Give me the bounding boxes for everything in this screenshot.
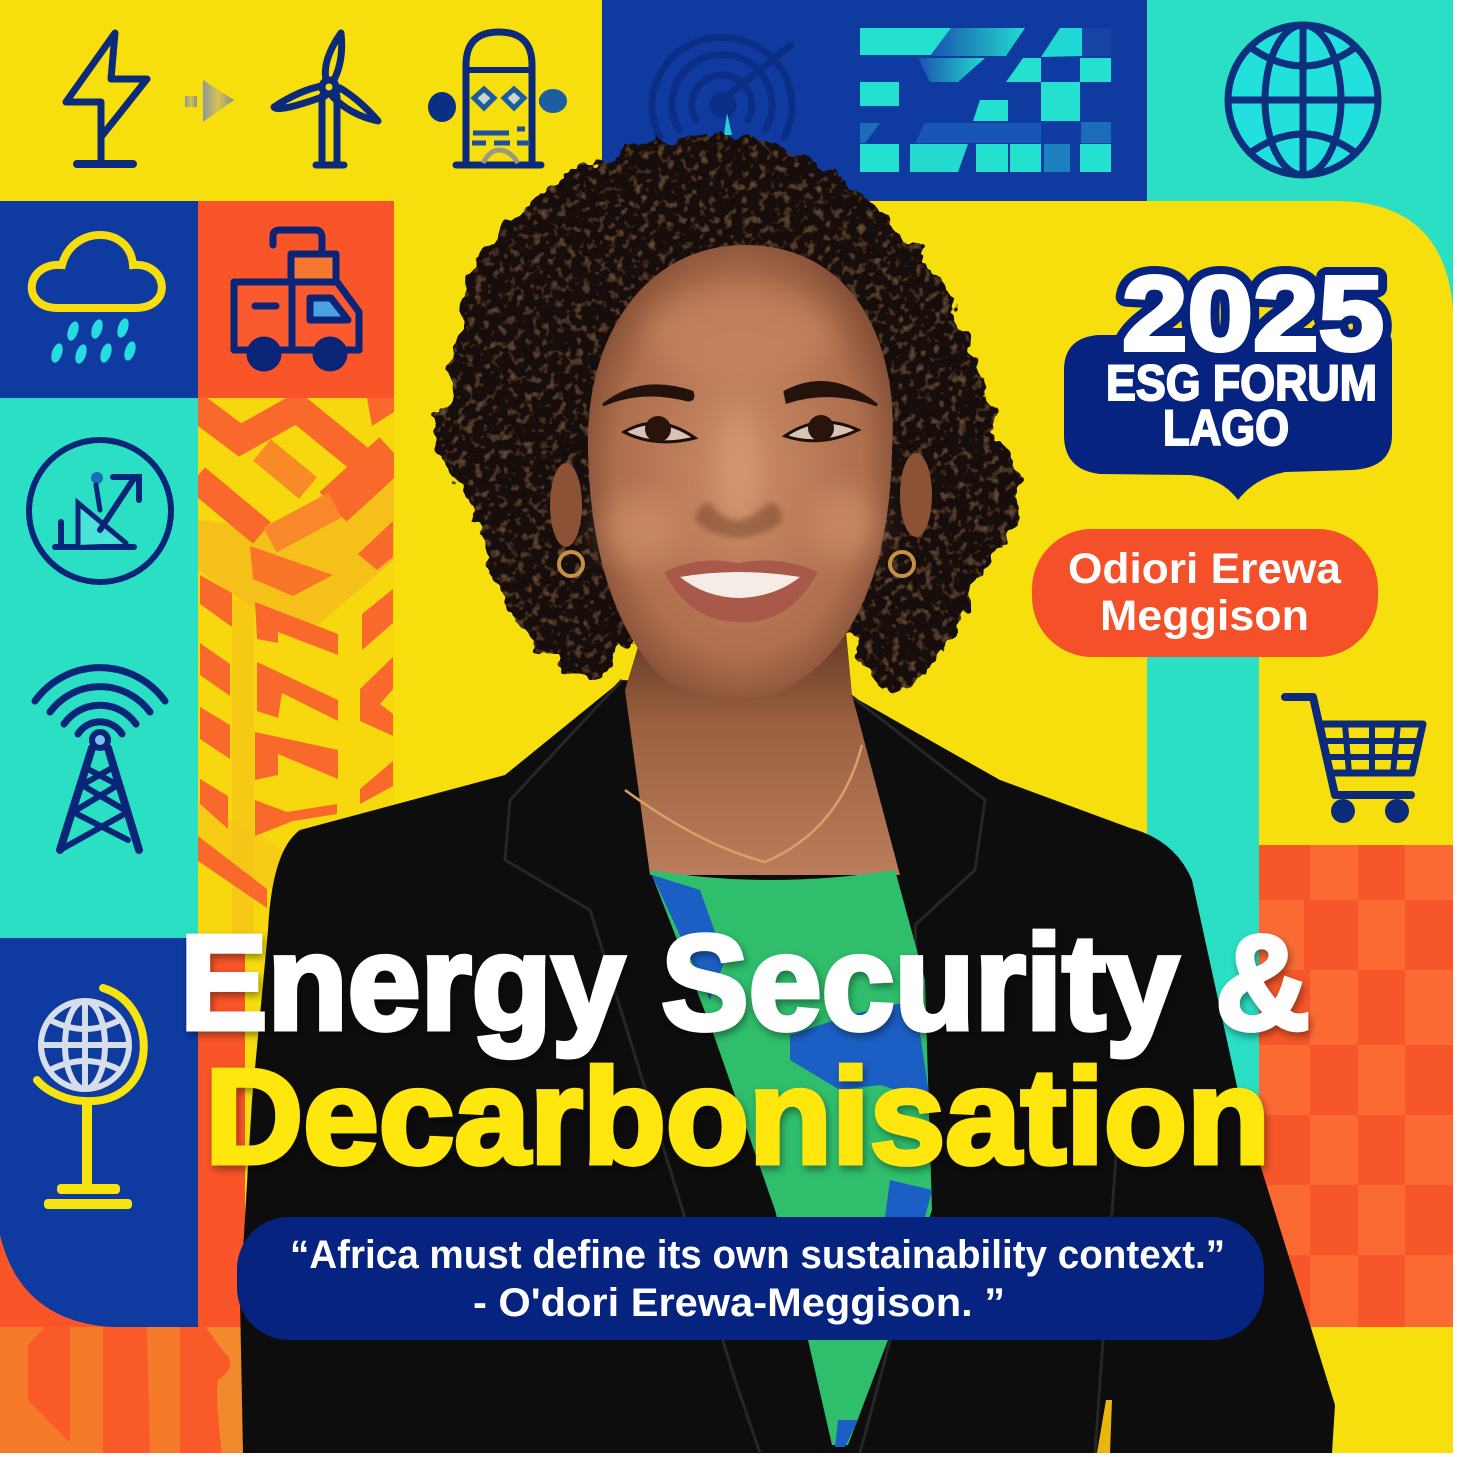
face [588, 245, 893, 699]
last name line: Meggison [1100, 592, 1309, 640]
forum name: ESG FORUM [1106, 355, 1377, 411]
icon: shopping cart [1285, 697, 1423, 823]
icon: teal mosaic blocks [860, 28, 1111, 172]
title: Energy Security &: Energy Security & [180, 907, 1310, 1058]
left eyebrow [603, 386, 693, 405]
quote line one: “Africa must define its own sustainability context.” [290, 1233, 1225, 1277]
panel: teal vertical strip [1147, 650, 1259, 1100]
right eyebrow [785, 383, 877, 405]
panel: top navy block [602, 0, 1147, 201]
neck and chest [625, 620, 900, 875]
year outline: 2025 [1122, 255, 1384, 373]
earrings [559, 552, 914, 576]
left eye [624, 416, 695, 442]
panel: teal left column [0, 398, 198, 938]
icon: delivery truck [234, 230, 359, 368]
title: Decarbonisation: Decarbonisation [205, 1041, 1270, 1192]
icon: radar target [652, 37, 792, 137]
icon: growth chart in circle [29, 440, 171, 582]
callout: quote pill [237, 1217, 1264, 1340]
ears [550, 453, 932, 547]
panel: top right teal corner [1147, 0, 1453, 310]
icon: lightning bolt [66, 33, 147, 164]
blazer [240, 680, 1335, 1453]
smile [664, 560, 818, 622]
panel: lower left orange block [0, 938, 245, 1328]
name pill: Odiori Erewa Meggison [1032, 529, 1378, 657]
right eye [785, 415, 858, 441]
location: LAGO [1163, 400, 1289, 456]
year: 2025 [1122, 255, 1384, 373]
panel: orange chevron pattern [192, 398, 394, 943]
panel: orange truck tile [198, 201, 394, 398]
icon: teal globe [1228, 25, 1378, 175]
yellow gap at right sleeve [1097, 1400, 1112, 1453]
nose shadow [695, 503, 782, 538]
event badge: 2025 ESG Forum [1064, 255, 1392, 500]
blazer lapels [505, 680, 1120, 1453]
icon: desk globe [37, 988, 144, 1209]
icon: kiosk robot [428, 32, 567, 165]
icon: arrow [185, 80, 234, 122]
hair [438, 136, 1019, 692]
quote line two: - O'dori Erewa-Meggison. ” [473, 1281, 1005, 1325]
first name line: Odiori Erewa [1068, 545, 1342, 593]
facial highlights [602, 290, 877, 565]
panel: orange stripes bottom left [0, 1327, 245, 1453]
panel: orange checker pattern [1259, 845, 1453, 1327]
icon: signal tower [35, 668, 165, 850]
icon: rain cloud [32, 235, 162, 365]
portrait: woman in black blazer [240, 136, 1335, 1453]
speech bubble [1064, 335, 1392, 500]
necklace [625, 745, 862, 862]
panel: lower left navy block [0, 938, 198, 1327]
panel: navy cloud tile [0, 201, 198, 398]
icon: wind turbine [274, 33, 378, 165]
top: green patterned shirt [650, 870, 932, 1447]
